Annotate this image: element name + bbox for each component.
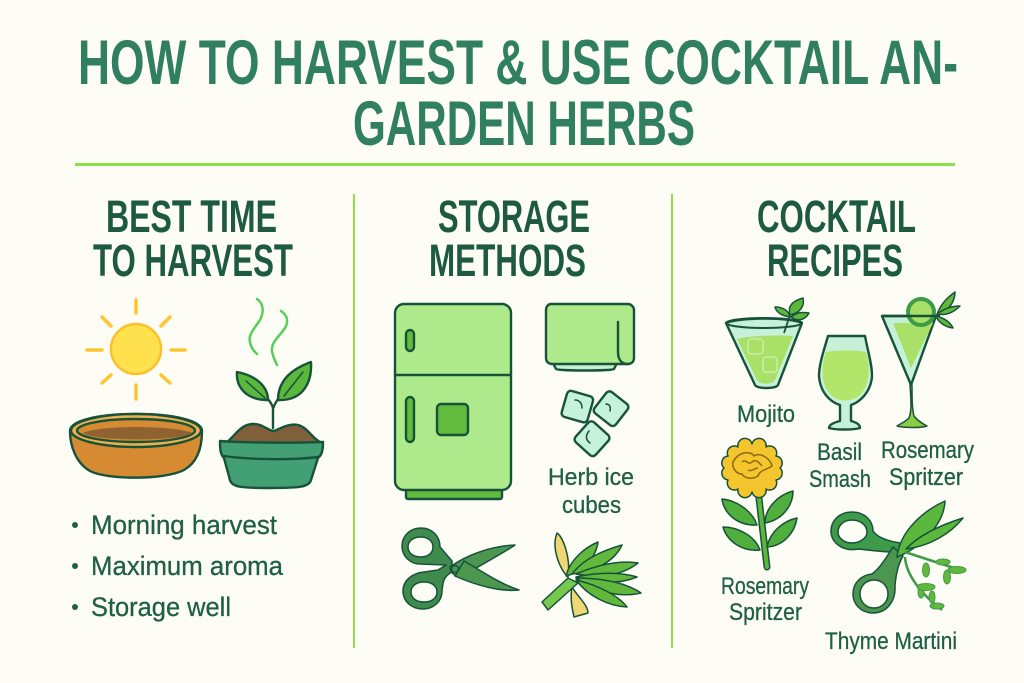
label: herb ice cubes: Herb ice — [548, 464, 634, 491]
panel: cocktail recipes — [721, 191, 974, 655]
label: herb ice cubes: cubes — [562, 492, 621, 519]
icon: scissors with thyme — [831, 501, 966, 613]
icon: refrigerator — [395, 304, 511, 499]
icon: sun — [87, 300, 185, 399]
heading: best time to harvest — [93, 191, 293, 286]
list: harvest tips: Maximum aroma — [91, 551, 284, 581]
heading: storage methods: STORAGE — [438, 191, 590, 242]
title — [78, 28, 958, 159]
heading: cocktail recipes: RECIPES — [767, 235, 903, 286]
list: harvest tips — [72, 510, 284, 622]
icon: herb seedling in pot — [220, 299, 323, 488]
icon: scissors — [402, 528, 519, 609]
title: GARDEN HERBS — [353, 89, 695, 159]
label: basil smash: Smash — [809, 466, 871, 493]
label: rosemary spritzer bottom: Rosemary — [721, 573, 809, 600]
label: rosemary spritzer bottom — [721, 573, 809, 626]
heading: storage methods: METHODS — [429, 235, 586, 286]
icon: yellow flower — [722, 438, 797, 567]
label: thyme martini: Thyme Martini — [825, 628, 957, 655]
heading: best time to harvest: TO HARVEST — [93, 235, 293, 286]
label: rosemary spritzer top: Rosemary — [881, 437, 974, 464]
label: herb ice cubes — [548, 464, 634, 519]
heading: best time to harvest: BEST TIME — [106, 191, 277, 242]
label: rosemary spritzer top: Spritzer — [889, 464, 963, 491]
label: basil smash: Basil — [817, 439, 862, 466]
label: rosemary spritzer bottom: Spritzer — [729, 599, 802, 626]
panel: best time to harvest — [70, 191, 323, 622]
icon: rosemary spritzer martini glass — [882, 292, 960, 428]
heading: cocktail recipes — [757, 191, 916, 286]
heading: storage methods — [429, 191, 590, 286]
label: rosemary spritzer top — [881, 437, 974, 491]
list: harvest tips: Storage well — [91, 592, 231, 622]
heading: cocktail recipes: COCKTAIL — [757, 191, 916, 242]
icon: basil smash glass — [819, 336, 872, 430]
icon: herb ice cubes — [561, 390, 630, 458]
label: basil smash — [809, 439, 871, 493]
icon: storage container — [546, 304, 634, 370]
icon: mojito glass — [726, 298, 809, 388]
list: harvest tips: Morning harvest — [91, 510, 277, 540]
icon: herb bundle — [542, 533, 641, 617]
icon: terracotta bowl — [70, 414, 202, 478]
panel: storage methods — [395, 191, 641, 617]
label: mojito: Mojito — [737, 401, 795, 428]
